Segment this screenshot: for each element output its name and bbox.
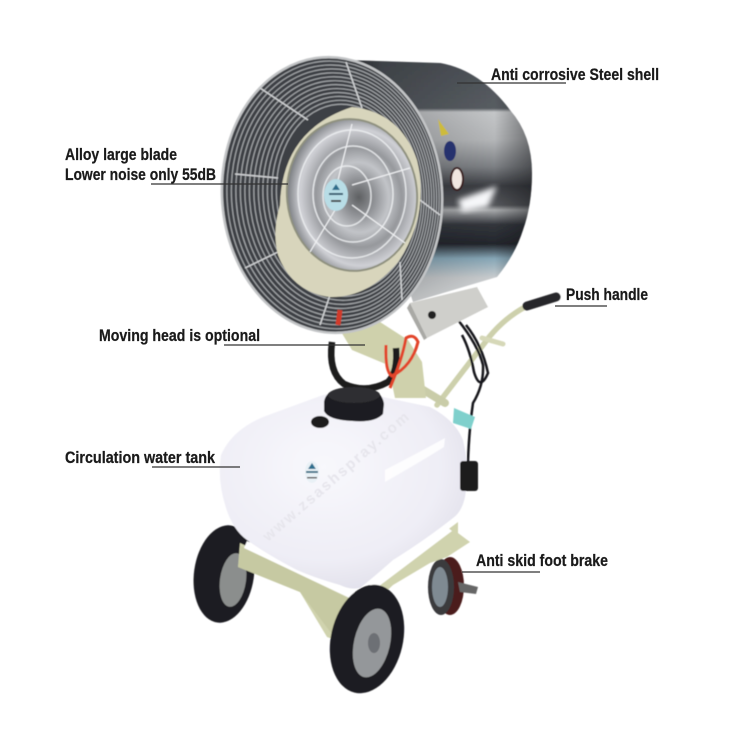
- rear wheel with brake: [428, 557, 478, 615]
- front wheel: [320, 577, 414, 701]
- control box: [407, 287, 488, 340]
- callout: Anti skid foot brake: Anti skid foot brake: [476, 551, 608, 570]
- callout: Alloy large blade: Alloy large blade: [65, 145, 177, 164]
- callout: Circulation water tank: Circulation water tank: [65, 448, 215, 467]
- callout: Alloy large blade: Lower noise only 55dB: [65, 165, 216, 184]
- cart base: [238, 522, 470, 640]
- warning label: [438, 119, 449, 136]
- water tank: [220, 392, 467, 589]
- callout: Push handle: Push handle: [566, 285, 648, 304]
- black hose loop: [331, 342, 396, 389]
- tank small cap: [311, 416, 329, 428]
- steel shell: [345, 60, 532, 302]
- tank logo: [305, 461, 319, 483]
- push handle frame: [420, 297, 556, 405]
- illustration: misting fan on cart: [187, 50, 556, 701]
- callout: Moving head is optional: Moving head is optional: [99, 326, 260, 345]
- blue label: [444, 141, 456, 161]
- fan guard: [213, 50, 451, 340]
- teal tag: [453, 408, 475, 429]
- beige blade housing: [275, 107, 421, 297]
- electrical cord and switch: [458, 320, 488, 491]
- clear fan blade: [279, 113, 425, 277]
- left wheel: [187, 521, 261, 627]
- fan hub logo: [324, 179, 348, 211]
- tank main cap: [324, 387, 384, 421]
- tank highlight: [385, 438, 445, 482]
- red label: [451, 168, 463, 190]
- mount bracket: [340, 322, 426, 398]
- callout: Push handle: [555, 285, 648, 306]
- watermark: www.zsashspray.com: [259, 409, 413, 546]
- red cables: [386, 336, 418, 388]
- callout: Alloy large blade: [65, 145, 288, 184]
- callout: Anti corrosive Steel shell: Anti corrosive Steel shell: [491, 65, 659, 84]
